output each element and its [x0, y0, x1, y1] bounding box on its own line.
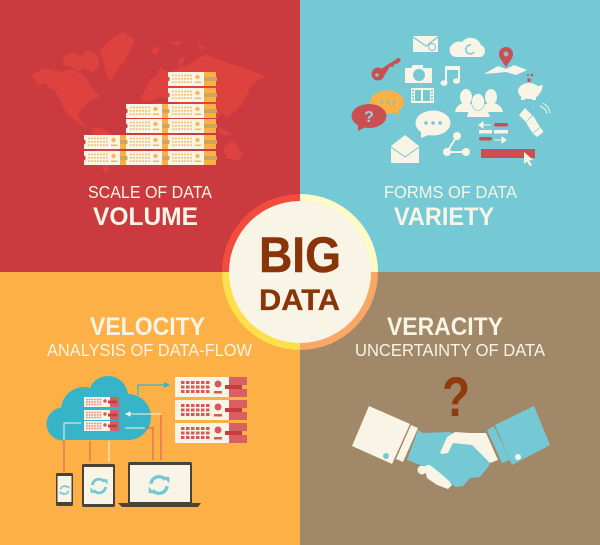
data flow arrows [64, 382, 170, 472]
icon: cloud sync [450, 38, 485, 57]
title: big: BIG [259, 227, 341, 283]
subtitle: uncertainty of data: UNCERTAINTY OF DATA [355, 340, 545, 360]
icon: chat bubble [416, 110, 450, 138]
panel: variety [300, 0, 600, 272]
white hand [440, 432, 498, 463]
icon: open envelope [391, 135, 419, 163]
right cuff [487, 406, 550, 465]
icon: sliders [479, 122, 508, 143]
icon: connected devices [519, 103, 550, 137]
panel: velocity [0, 272, 300, 545]
left cuff [352, 406, 418, 464]
server stack [84, 72, 217, 165]
panel: veracity [300, 272, 600, 545]
icon: question bubble: ? [364, 109, 374, 126]
icon: phone [56, 473, 73, 506]
icon: search bar with cursor [481, 149, 535, 166]
white fingers [418, 464, 452, 489]
icon: share [443, 132, 470, 156]
icon: question mark: ? [442, 365, 470, 428]
icon: laptop [118, 462, 201, 507]
icon: question bubble [352, 104, 386, 131]
icon: camera [405, 65, 432, 83]
subtitle: scale of data: SCALE OF DATA [88, 182, 212, 202]
title: data: DATA [259, 284, 340, 317]
icon: people group [455, 89, 503, 117]
big servers [175, 377, 247, 443]
center badge [222, 194, 378, 350]
subtitle: analysis of data-flow: ANALYSIS OF DATA-FLOW [47, 340, 252, 360]
icon: map pin [484, 47, 527, 75]
heading: volume: VOLUME [93, 203, 198, 231]
icon: email [413, 36, 438, 52]
icon: yellow chat bubble [370, 90, 404, 117]
panel: volume [0, 0, 300, 272]
icon: piggy bank [518, 74, 543, 100]
heading: veracity: VERACITY [387, 313, 503, 341]
icon: music note [440, 66, 460, 86]
heading: velocity: VELOCITY [90, 313, 205, 341]
world map [32, 32, 267, 173]
icon: handshake [352, 406, 550, 489]
icon: key [372, 58, 401, 80]
blue hand [407, 430, 490, 487]
heading: variety: VARIETY [394, 203, 494, 231]
icon: tablet [82, 464, 115, 507]
cloud with servers [46, 376, 151, 440]
subtitle: forms of data: FORMS OF DATA [384, 182, 517, 202]
icon: film strip [411, 88, 434, 103]
